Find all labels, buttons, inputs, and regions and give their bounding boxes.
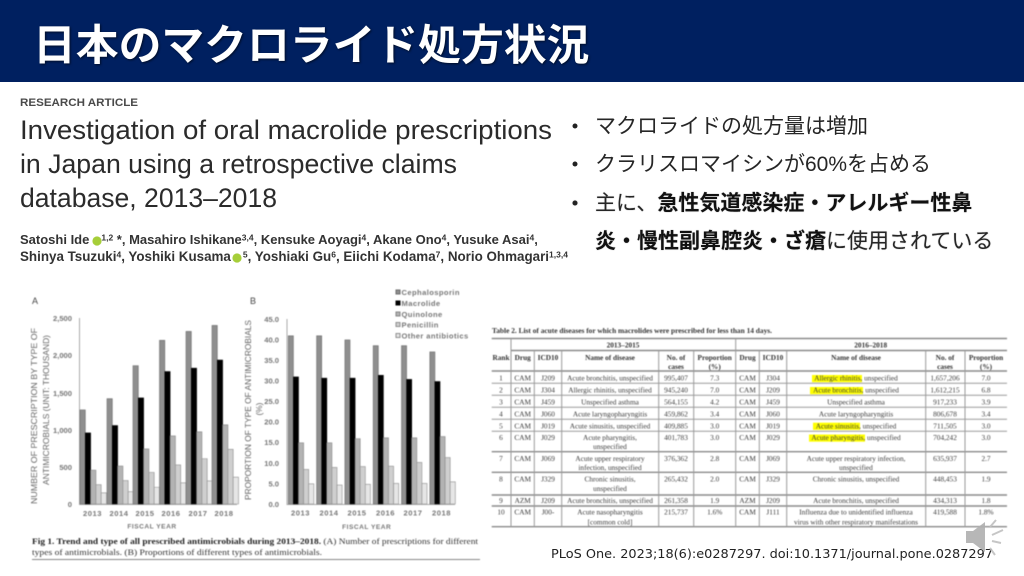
- row 6: 3.0: [710, 433, 720, 442]
- paper title: [20, 115, 552, 213]
- row 4: J060: [541, 410, 555, 418]
- row 1: 1: [499, 374, 503, 382]
- citation: PLoS One. 2023;18(6):e0287297. doi:10.1371/journal.pone.0287297: [551, 547, 993, 561]
- row 2: 6.8: [981, 386, 991, 394]
- row 2: Acute bronchitis, unspecified: [813, 386, 899, 394]
- authors: 1,2: [101, 232, 113, 242]
- row 6: [499, 433, 991, 451]
- row 6: 6: [499, 433, 503, 442]
- row 10: virus with other respiratory manifestations: [794, 518, 918, 526]
- chart A y axis title: ANTIMICROBIALS (UNIT: THOUSAND): [41, 335, 51, 485]
- authors: [20, 232, 568, 264]
- row 3: 4.2: [710, 398, 720, 406]
- row 2: Allergic rhinitis, unspecified: [568, 386, 652, 394]
- chart A y axis labels: [53, 314, 72, 509]
- table header: No. of: [936, 353, 955, 362]
- row 9: 1.9: [710, 496, 720, 505]
- row 3: Unspecified asthma: [581, 398, 640, 406]
- row 7: 2.7: [981, 454, 991, 463]
- row 5: CAM: [739, 422, 756, 430]
- chart B y axis labels: 15.0: [264, 438, 279, 447]
- table header: Proportion: [969, 353, 1003, 362]
- row 5: CAM: [514, 422, 532, 430]
- authors: , Eiichi Kodama: [336, 249, 436, 264]
- row 7: Acute upper respiratory infection,: [807, 454, 906, 463]
- table rows: [497, 374, 994, 526]
- key points bullets: [572, 115, 993, 253]
- legend: Macrolide: [402, 299, 441, 308]
- row 8: CAM: [739, 474, 756, 484]
- article type label: RESEARCH ARTICLE: [20, 97, 139, 109]
- bullet 1: マクロライドの処方量は増加: [595, 115, 868, 138]
- chart B x axis labels: 2017: [404, 508, 422, 518]
- table header: ICD10: [538, 353, 559, 362]
- row 9: AZM: [739, 496, 756, 505]
- table header: (%): [980, 362, 993, 371]
- row 1: Allergic rhinitis, unspecified: [814, 374, 898, 382]
- row 6: Acute pharyngitis,: [583, 433, 637, 442]
- chart B y axis labels: 25.0: [264, 397, 279, 406]
- table header: 2016–2018: [854, 340, 887, 350]
- authors: Satoshi Ide: [20, 232, 89, 247]
- row 10: Acute nasopharyngitis: [577, 508, 643, 516]
- row 2: [499, 386, 991, 394]
- row 4: 3.4: [710, 410, 720, 418]
- row 8: Chronic sinusitis,: [584, 474, 636, 484]
- paper title: database, 2013–2018: [20, 183, 277, 213]
- row 6: J029: [541, 433, 555, 442]
- row 10: 1.8%: [978, 508, 994, 516]
- row 8: J329: [766, 474, 780, 484]
- row 2: 945,240: [664, 386, 688, 394]
- row 5: 3.0: [981, 422, 991, 430]
- row 6: 3.0: [981, 433, 991, 442]
- row 9: 261,358: [664, 496, 688, 505]
- row 9: AZM: [515, 496, 531, 505]
- row 7: CAM: [739, 454, 756, 463]
- row 5: 409,885: [664, 422, 688, 430]
- table header: No. of: [667, 353, 686, 362]
- authors: 4: [442, 232, 447, 242]
- row 8: 2.0: [710, 474, 720, 484]
- row 10: CAM: [739, 508, 756, 516]
- row 4: 806,678: [933, 410, 957, 418]
- table header: cases: [668, 362, 684, 371]
- chart B x axis labels: FISCAL YEAR: [342, 524, 391, 531]
- row 7: 2.8: [710, 454, 720, 463]
- row 1: [499, 374, 991, 382]
- authors: 4: [116, 250, 121, 260]
- row 7: unspecified: [839, 463, 873, 472]
- chart B y axis labels: 45.0: [264, 315, 279, 324]
- row 4: 3.4: [981, 410, 991, 418]
- paper title: Investigation of oral macrolide prescriptions: [20, 115, 552, 145]
- chart A y axis title: NUMBER OF PRESCRIPTION BY TYPE OF: [29, 328, 39, 504]
- row 10: [common cold]: [588, 518, 632, 526]
- row 6: 401,783: [664, 433, 688, 442]
- chart A y axis labels: 1,000: [53, 426, 72, 435]
- row 3: 3.9: [981, 398, 991, 406]
- table header: cases: [937, 362, 953, 371]
- authors: 4: [529, 232, 534, 242]
- row 7: [499, 454, 991, 472]
- chart A bars: [80, 325, 238, 504]
- row 1: 7.0: [981, 374, 991, 382]
- row 9: Acute bronchitis, unspecified: [813, 496, 899, 505]
- row 1: CAM: [514, 374, 532, 382]
- table header: Proportion: [698, 353, 732, 362]
- authors: 7: [436, 250, 441, 260]
- row 7: J069: [541, 454, 555, 463]
- row 5: Acute sinusitis, unspecified: [570, 422, 651, 430]
- row 1: 995,407: [664, 374, 688, 382]
- chart B x axis labels: 2013: [291, 508, 310, 518]
- authors: , Yoshiki Kusama: [121, 249, 231, 264]
- row 8: 8: [499, 474, 503, 484]
- chart B y axis labels: [264, 315, 279, 509]
- authors: ,: [534, 232, 538, 247]
- row 10: 1.6%: [707, 508, 722, 516]
- row 7: J069: [766, 454, 780, 463]
- row 10: [497, 508, 994, 526]
- header banner: [0, 0, 1024, 82]
- authors: 1,3,4: [549, 250, 568, 260]
- row 1: CAM: [739, 374, 756, 382]
- row 9: 1.8: [981, 496, 991, 505]
- row 2: 1,612,215: [930, 386, 960, 394]
- row 3: Unspecified asthma: [827, 398, 886, 406]
- row 9: 434,313: [933, 496, 957, 505]
- table header: (%): [709, 362, 721, 371]
- row 5: Acute sinusitis, unspecified: [816, 422, 897, 430]
- chart B y axis labels: 10.0: [264, 459, 279, 468]
- figure caption: Fig 1. Trend and type of all prescribed antimicrobials during 2013–2018. (A) Number of prescriptions for different: [32, 536, 479, 546]
- row 10: J00-: [542, 508, 555, 516]
- row 9: [499, 496, 991, 505]
- row 1: Acute bronchitis, unspecified: [567, 374, 653, 382]
- authors: Shinya Tsuzuki: [20, 249, 116, 264]
- figure caption: types of antimicrobials. (B) Proportions of different types of antimicrobials.: [32, 547, 322, 557]
- row 9: J209: [541, 496, 555, 505]
- icon: speaker: [966, 520, 1003, 555]
- row 3: 564,155: [664, 398, 688, 406]
- authors: *, Masahiro Ishikane: [113, 232, 242, 247]
- chart B y axis labels: 20.0: [264, 418, 279, 426]
- row 7: 7: [499, 454, 503, 463]
- row 5: 3.0: [710, 422, 720, 430]
- row 2: J209: [766, 386, 780, 394]
- chart B y axis labels: 40.0: [264, 336, 279, 344]
- table header: Drug: [739, 353, 756, 362]
- chart B x axis labels: 2018: [432, 508, 451, 518]
- row 5: J019: [541, 422, 555, 430]
- row 4: CAM: [739, 410, 756, 418]
- row 1: J209: [541, 374, 555, 382]
- chart A x axis labels: 2018: [215, 509, 233, 518]
- row 10: 215,737: [664, 508, 688, 516]
- row 3: 917,233: [933, 398, 957, 406]
- row 7: 376,362: [664, 454, 688, 463]
- bullet 3: 主に、急性気道感染症・アレルギー性鼻: [595, 191, 972, 215]
- chart A x axis labels: 2013: [83, 509, 102, 518]
- table caption: Table 2. List of acute diseases for which macrolides were prescribed for less than 14 days.: [492, 326, 772, 335]
- table header: Name of disease: [831, 353, 882, 362]
- chart B x axis labels: 2014: [320, 508, 339, 518]
- table header: Drug: [515, 353, 531, 362]
- chart A x axis labels: FISCAL YEAR: [127, 524, 177, 530]
- row 4: [499, 410, 991, 418]
- legend: Penicillin: [402, 320, 439, 330]
- row 3: J459: [541, 398, 555, 406]
- row 4: Acute laryngopharyngitis: [819, 410, 893, 418]
- row 2: 2: [499, 386, 503, 394]
- authors: 6: [331, 250, 336, 260]
- authors: 3,4: [242, 232, 254, 242]
- row 2: CAM: [514, 386, 532, 394]
- bullet 3: [572, 191, 993, 253]
- chart A y axis labels: 2,500: [53, 314, 72, 323]
- row 10: Influenza due to unidentified influenza: [799, 508, 913, 516]
- authors: , Akane Ono: [366, 232, 442, 247]
- row 1: 1,657,206: [930, 374, 960, 382]
- authors: , Norio Ohmagari: [440, 249, 549, 264]
- chart A y axis title: [29, 328, 51, 504]
- row 8: 265,432: [664, 474, 688, 484]
- row 6: unspecified: [593, 442, 627, 451]
- row 8: Chronic sinusitis, unspecified: [813, 474, 900, 484]
- legend: [396, 288, 469, 340]
- paper heading block: [20, 97, 568, 264]
- row 10: 419,588: [933, 508, 957, 516]
- table header: ICD10: [763, 353, 784, 362]
- chart B y axis labels: 0.0: [268, 500, 279, 509]
- chart A x axis labels: 2015: [136, 509, 155, 518]
- row 6: Acute pharyngitis, unspecified: [811, 433, 901, 442]
- bullet 3: 炎・慢性副鼻腔炎・ざ瘡に使用されている: [595, 229, 993, 253]
- authors: , Kensuke Aoyagi: [254, 232, 362, 247]
- row 8: 448,453: [933, 474, 957, 484]
- legend: Cephalosporin: [402, 288, 460, 297]
- row 8: [499, 474, 991, 493]
- row 6: CAM: [739, 433, 756, 442]
- chart A y axis labels: 500: [59, 463, 72, 472]
- table header: [492, 340, 1003, 371]
- row 1: J304: [766, 374, 780, 382]
- legend: Other antibiotics: [402, 332, 469, 340]
- row 2: J304: [541, 386, 555, 394]
- row 5: 5: [499, 422, 503, 430]
- figure caption: [32, 536, 480, 560]
- row 4: CAM: [514, 410, 532, 418]
- row 4: 459,862: [664, 410, 688, 418]
- chart B y axis labels: 5.0: [268, 480, 279, 488]
- row 10: CAM: [514, 508, 532, 516]
- chart B y axis labels: 30.0: [264, 376, 279, 386]
- icon: ORCID badges: [92, 236, 242, 263]
- row 5: 711,505: [933, 422, 957, 430]
- table header: 2013–2015: [607, 340, 640, 350]
- table 2: acute diseases: [492, 326, 1007, 527]
- row 8: 1.9: [981, 474, 991, 484]
- chart A: number of prescriptions: [29, 296, 238, 530]
- row 1: 7.3: [710, 374, 720, 382]
- chart B bars: [288, 336, 455, 504]
- chart B: proportion of antimicrobials: B: [250, 296, 256, 306]
- chart B y axis title: PROPORTION OF TYPE OF ANTIMICROBIALS: [243, 320, 253, 500]
- row 7: 635,937: [933, 454, 957, 463]
- paper title: in Japan using a retrospective claims: [20, 149, 457, 179]
- row 10: J111: [766, 508, 780, 516]
- row 8: CAM: [514, 474, 532, 484]
- figure 1 charts: [29, 288, 480, 560]
- row 9: 9: [499, 496, 503, 505]
- chart B: proportion of antimicrobials: [243, 296, 455, 531]
- yellow highlights: [809, 375, 865, 442]
- row 9: J209: [766, 496, 780, 505]
- legend: Quinolone: [402, 310, 443, 319]
- row 10: 10: [497, 508, 505, 516]
- row 8: J329: [541, 474, 555, 484]
- chart A y axis labels: 1,500: [53, 389, 72, 398]
- authors: , Yoshiaki Gu: [248, 249, 331, 264]
- row 2: 7.0: [710, 386, 720, 394]
- chart B x axis labels: 2016: [376, 508, 395, 518]
- row 3: CAM: [514, 398, 532, 406]
- chart A x axis labels: 2014: [110, 509, 129, 518]
- title: 日本のマクロライド処方状況: [33, 22, 589, 70]
- row 3: CAM: [739, 398, 756, 406]
- chart A y axis labels: 0: [68, 500, 72, 509]
- row 6: CAM: [514, 433, 532, 442]
- authors: 5: [243, 250, 248, 260]
- table header: Rank: [492, 353, 510, 362]
- row 4: J060: [766, 410, 780, 418]
- row 6: 704,242: [933, 433, 957, 442]
- bullet 2: クラリスロマイシンが60%を占める: [595, 153, 931, 176]
- table header: Name of disease: [585, 353, 636, 362]
- authors: 4: [362, 232, 367, 242]
- chart A y axis labels: 2,000: [53, 351, 72, 360]
- row 8: unspecified: [593, 484, 627, 493]
- row 7: infection, unspecified: [578, 463, 642, 472]
- chart A x axis labels: 2017: [189, 509, 207, 518]
- row 6: J029: [766, 433, 780, 442]
- chart B y axis title: (%): [254, 402, 264, 415]
- row 9: Acute bronchitis, unspecified: [567, 496, 653, 505]
- chart A x axis labels: [83, 509, 233, 530]
- row 3: J459: [766, 398, 780, 406]
- row 5: [499, 422, 991, 430]
- row 3: 3: [499, 398, 503, 406]
- row 3: [499, 398, 991, 406]
- row 4: Acute laryngopharyngitis: [573, 410, 647, 418]
- authors: , Yusuke Asai: [446, 232, 529, 247]
- chart B y axis title: [243, 320, 264, 500]
- row 7: Acute upper respiratory: [575, 454, 645, 463]
- chart B x axis labels: [291, 508, 451, 531]
- row 7: CAM: [514, 454, 532, 463]
- chart B y axis labels: 35.0: [264, 356, 279, 365]
- chart B x axis labels: 2015: [348, 508, 367, 518]
- chart A: number of prescriptions: A: [32, 296, 38, 306]
- row 5: J019: [766, 422, 780, 430]
- row 4: 4: [499, 410, 503, 418]
- chart A x axis labels: 2016: [162, 509, 180, 518]
- row 2: CAM: [739, 386, 756, 394]
